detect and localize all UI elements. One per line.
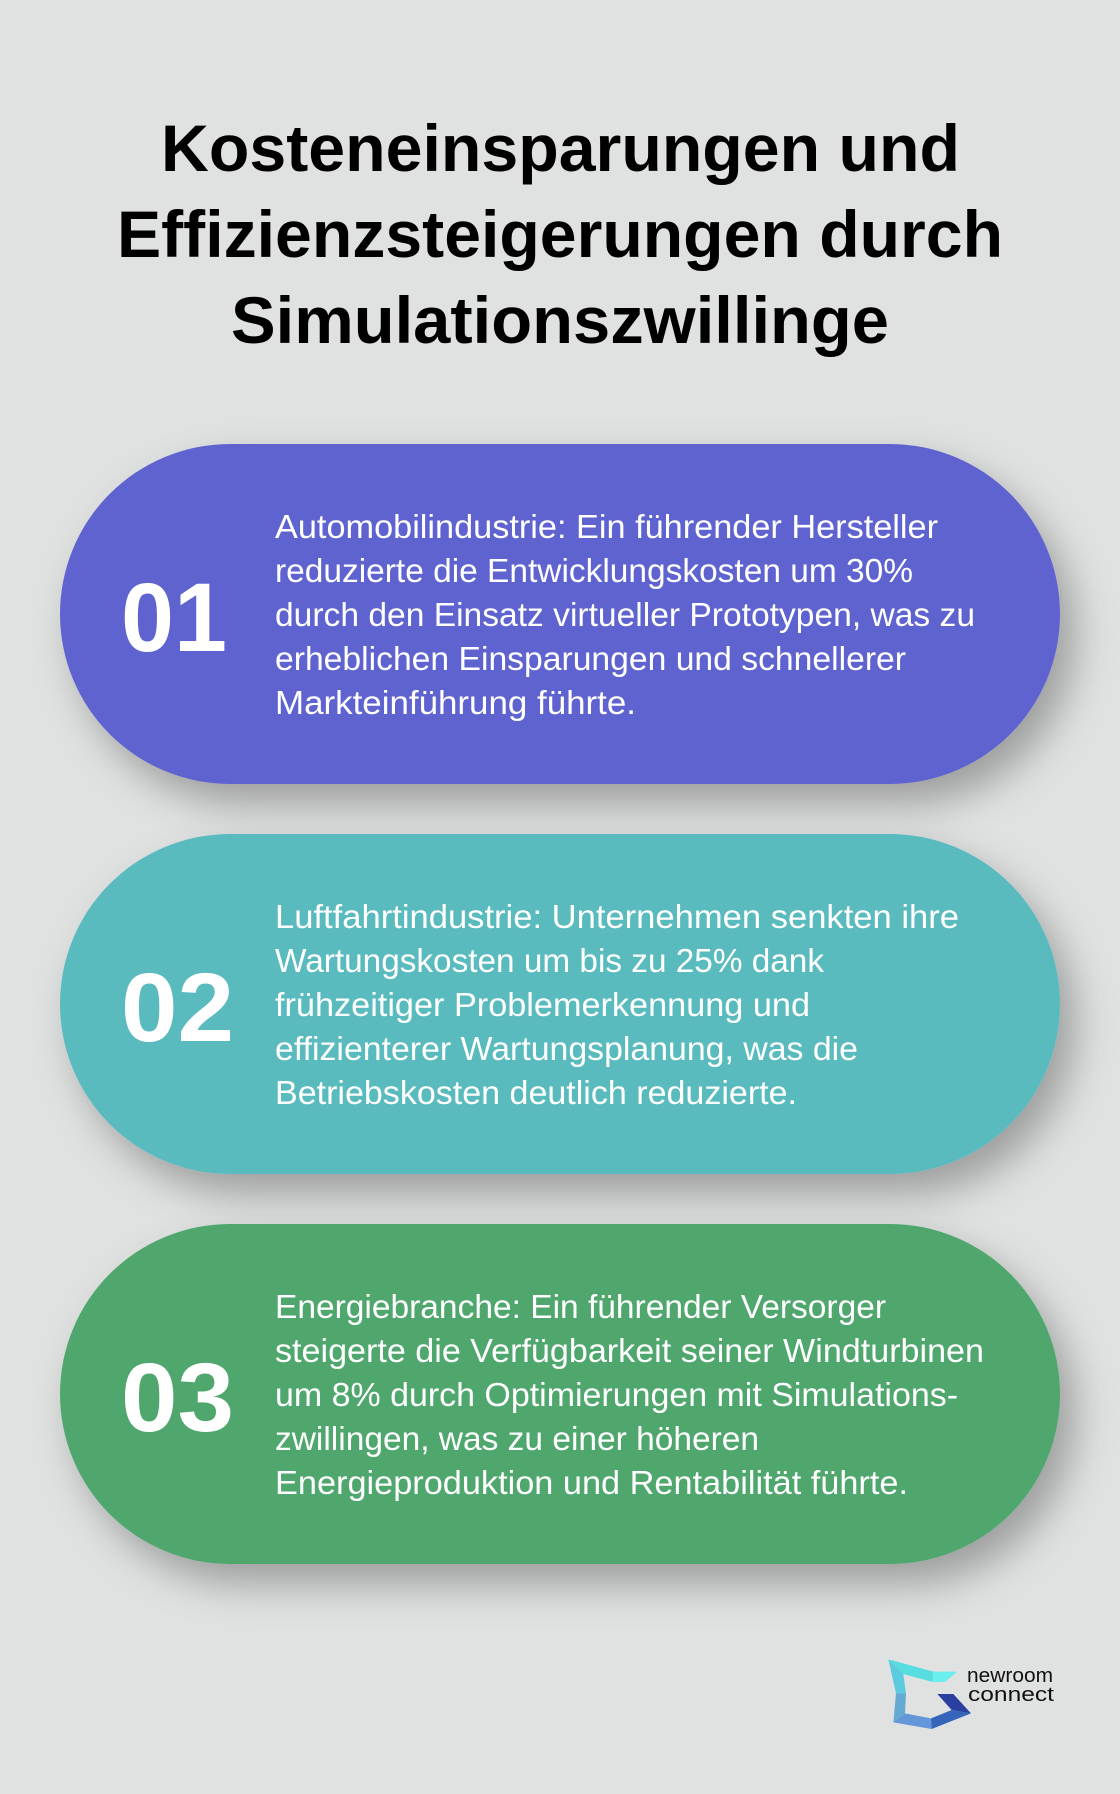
card 01 text: reduzierte die Entwicklungskosten um 30% [275,552,913,589]
card 02 text: frühzeitiger Problemerkennung und [275,986,810,1023]
card 02 number: 02 [121,953,234,1062]
card 03 text: Energiebranche: Ein führender Versorger [275,1288,886,1325]
card 02 text: Wartungskosten um bis zu 25% dank [275,942,824,979]
card 01 text: Markteinführung führte. [275,684,636,721]
logo wordmark: newroom [967,1665,1053,1687]
icon: logo mark [888,1659,971,1729]
title: Kosteneinsparungen und [161,111,960,185]
card 02 text [275,898,959,1111]
logo wordmark: connect [968,1684,1055,1706]
logo: newroom connect [888,1659,1055,1729]
card 01 text: durch den Einsatz virtueller Prototypen, was zu [275,596,975,633]
card 03 text: um 8% durch Optimierungen mit Simulations- [275,1376,958,1413]
panel: card 01 automotive [60,444,1060,784]
card 03 text: zwillingen, was zu einer höheren [275,1420,759,1457]
card 01 text: Automobilindustrie: Ein führender Hersteller [275,508,938,545]
card 02 text: effizienterer Wartungsplanung, was die [275,1030,858,1067]
card 03 text: steigerte die Verfügbarkeit seiner Windturbinen [275,1332,984,1369]
card 03 text [275,1288,984,1501]
card 01 background pill [60,444,1060,784]
card 01 text [275,508,975,721]
card 03 background pill [60,1224,1060,1564]
card 02 text: Luftfahrtindustrie: Unternehmen senkten ihre [275,898,959,935]
title: Simulationszwillinge [231,283,889,357]
title [117,111,1003,357]
title: Effizienzsteigerungen durch [117,197,1003,271]
logo wordmark [967,1665,1055,1706]
card 03 text: Energieproduktion und Rentabilität führte. [275,1464,908,1501]
card 02 background pill [60,834,1060,1174]
panel: card 03 energy [60,1224,1060,1564]
panel: card 02 aviation [60,834,1060,1174]
card 03 number: 03 [121,1343,234,1452]
card 01 number: 01 [121,563,227,672]
card 01 text: erheblichen Einsparungen und schnellerer [275,640,906,677]
card 02 text: Betriebskosten deutlich reduzierte. [275,1074,797,1111]
